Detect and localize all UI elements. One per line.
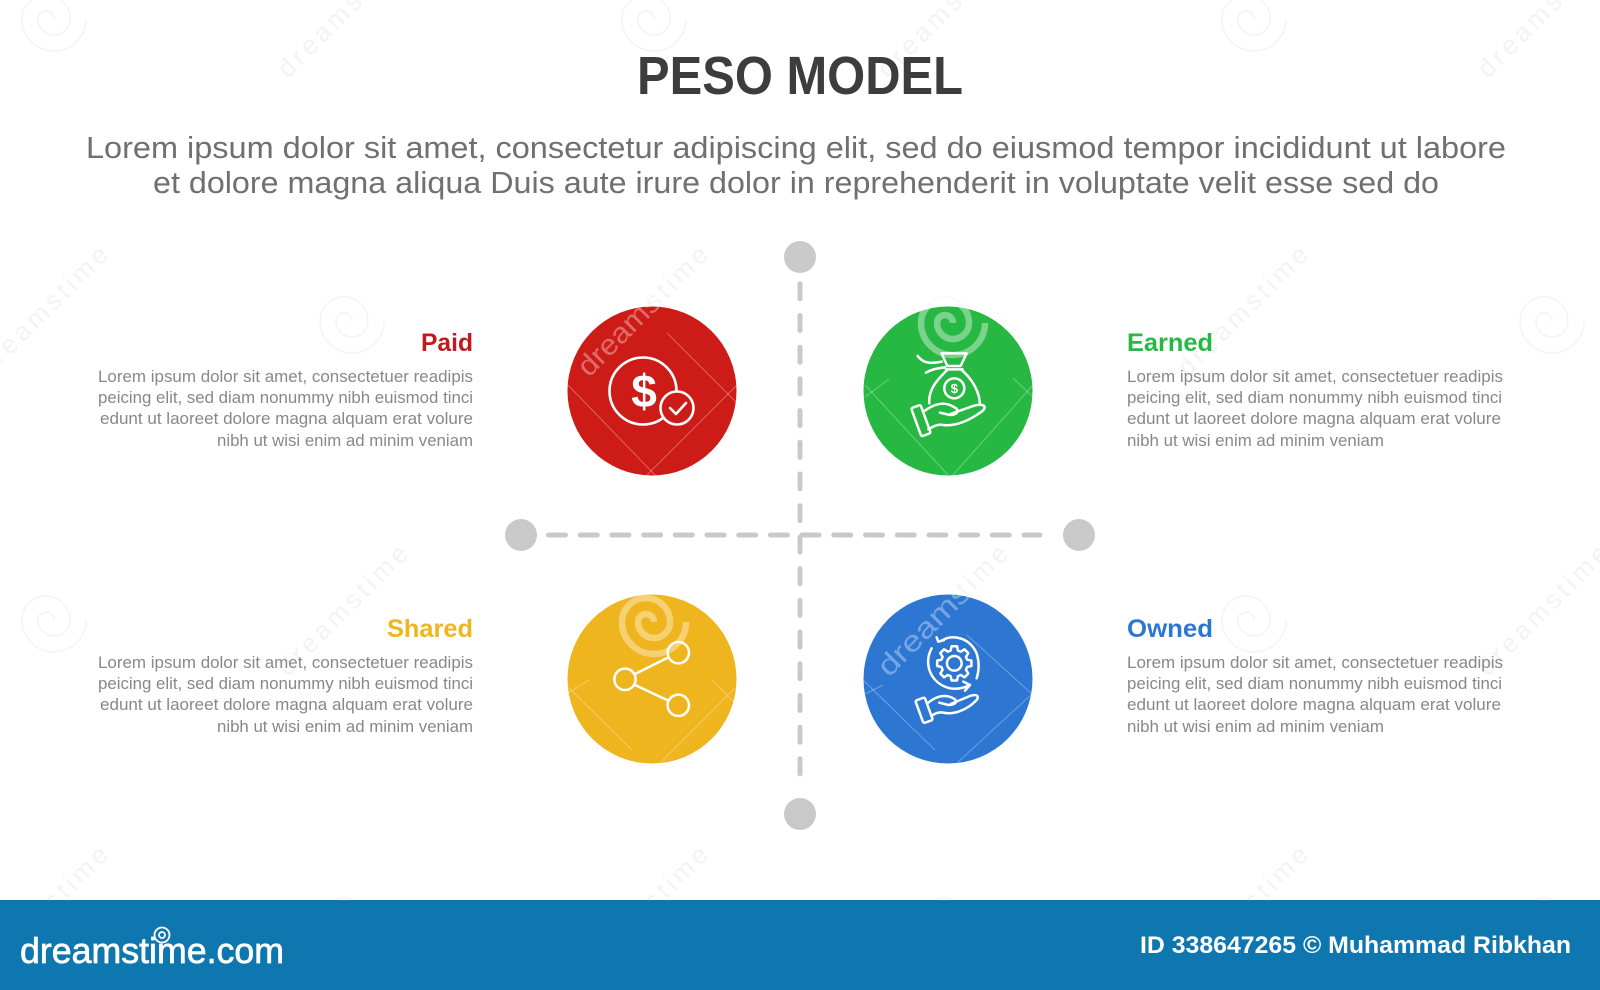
icon: share nodes: [614, 642, 689, 716]
panel: owned: [863, 577, 1503, 764]
text block: owned: edunt ut laoreet dolore magna alquam erat volure: [1127, 695, 1501, 714]
text block: shared: peicing elit, sed diam nonummy nibh euismod tinci: [98, 674, 473, 693]
panel: earned: [864, 299, 1503, 476]
text block: paid: edunt ut laoreet dolore magna alquam erat volure: [100, 409, 473, 428]
icon: money bag in hand: [911, 353, 985, 436]
panel: shared: [98, 594, 736, 764]
dashed cross axes: [505, 241, 1095, 830]
text block: shared: [98, 653, 473, 736]
text block: owned: Lorem ipsum dolor sit amet, consectetuer readipis: [1127, 653, 1503, 672]
background watermark pattern: dreamstime: [871, 538, 1014, 681]
text block: shared: edunt ut laoreet dolore magna alquam erat volure: [100, 695, 473, 714]
panel: paid: [98, 287, 737, 476]
icon: gear in hand: [915, 637, 979, 723]
watermark on owned circle: dreams: [871, 577, 977, 683]
circle: paid: [568, 306, 736, 476]
subtitle paragraph: [86, 130, 1506, 200]
footer credit: ID 338647265 © Muhammad Ribkhan: [1140, 932, 1571, 959]
footer logo: dreamstime.com: [20, 930, 284, 971]
heading: owned: Owned: [1127, 615, 1213, 643]
background watermark pattern: dreamstime: [1171, 239, 1314, 382]
text block: paid: Lorem ipsum dolor sit amet, consectetuer readipis: [98, 367, 473, 386]
subtitle paragraph: et dolore magna aliqua Duis aute irure dolor in reprehenderit in voluptate velit esse sed do: [153, 165, 1439, 200]
circle: owned: [864, 594, 1032, 764]
text block: earned: peicing elit, sed diam nonummy nibh euismod tinci: [1127, 388, 1502, 407]
heading: shared: Shared: [387, 615, 473, 643]
icon: money bag in hand: $: [951, 381, 959, 396]
text block: paid: [98, 367, 473, 450]
text block: earned: edunt ut laoreet dolore magna alquam erat volure: [1127, 409, 1501, 428]
text block: earned: Lorem ipsum dolor sit amet, consectetuer readipis: [1127, 367, 1503, 386]
title: PESO MODEL: [637, 46, 963, 106]
background watermark pattern: dreamstime: [271, 538, 414, 681]
background watermark pattern: dreamstime: [1171, 839, 1314, 982]
text block: paid: peicing elit, sed diam nonummy nibh euismod tinci: [98, 388, 473, 407]
watermark on paid circle: dreams: [571, 287, 667, 383]
watermark on shared circle: [568, 598, 735, 763]
watermark on owned circle: [863, 577, 1033, 763]
heading: earned: Earned: [1127, 329, 1213, 357]
background watermark pattern: dreamstime: [571, 839, 714, 982]
footer bar: [0, 900, 1600, 990]
watermark on paid circle: [568, 287, 737, 475]
text block: shared: Lorem ipsum dolor sit amet, consectetuer readipis: [98, 653, 473, 672]
text block: owned: nibh ut wisi enim ad minim veniam: [1127, 717, 1384, 736]
subtitle paragraph: Lorem ipsum dolor sit amet, consectetur adipiscing elit, sed do eiusmod tempor incididunt ut labore: [86, 130, 1506, 165]
text block: owned: peicing elit, sed diam nonummy nibh euismod tinci: [1127, 674, 1502, 693]
icon: dollar with check: $: [631, 365, 657, 417]
circle: earned: [864, 306, 1032, 476]
text block: owned: [1127, 653, 1503, 736]
background watermark pattern: dreamstime: [571, 239, 714, 382]
watermark on earned circle: [865, 299, 1033, 475]
text block: earned: nibh ut wisi enim ad minim veniam: [1127, 431, 1384, 450]
heading: paid: Paid: [421, 329, 473, 357]
text block: paid: nibh ut wisi enim ad minim veniam: [217, 431, 473, 450]
text block: shared: nibh ut wisi enim ad minim veniam: [217, 717, 473, 736]
icon: dollar with check: [610, 358, 694, 424]
circle: shared: [568, 594, 736, 764]
text block: earned: [1127, 367, 1503, 450]
